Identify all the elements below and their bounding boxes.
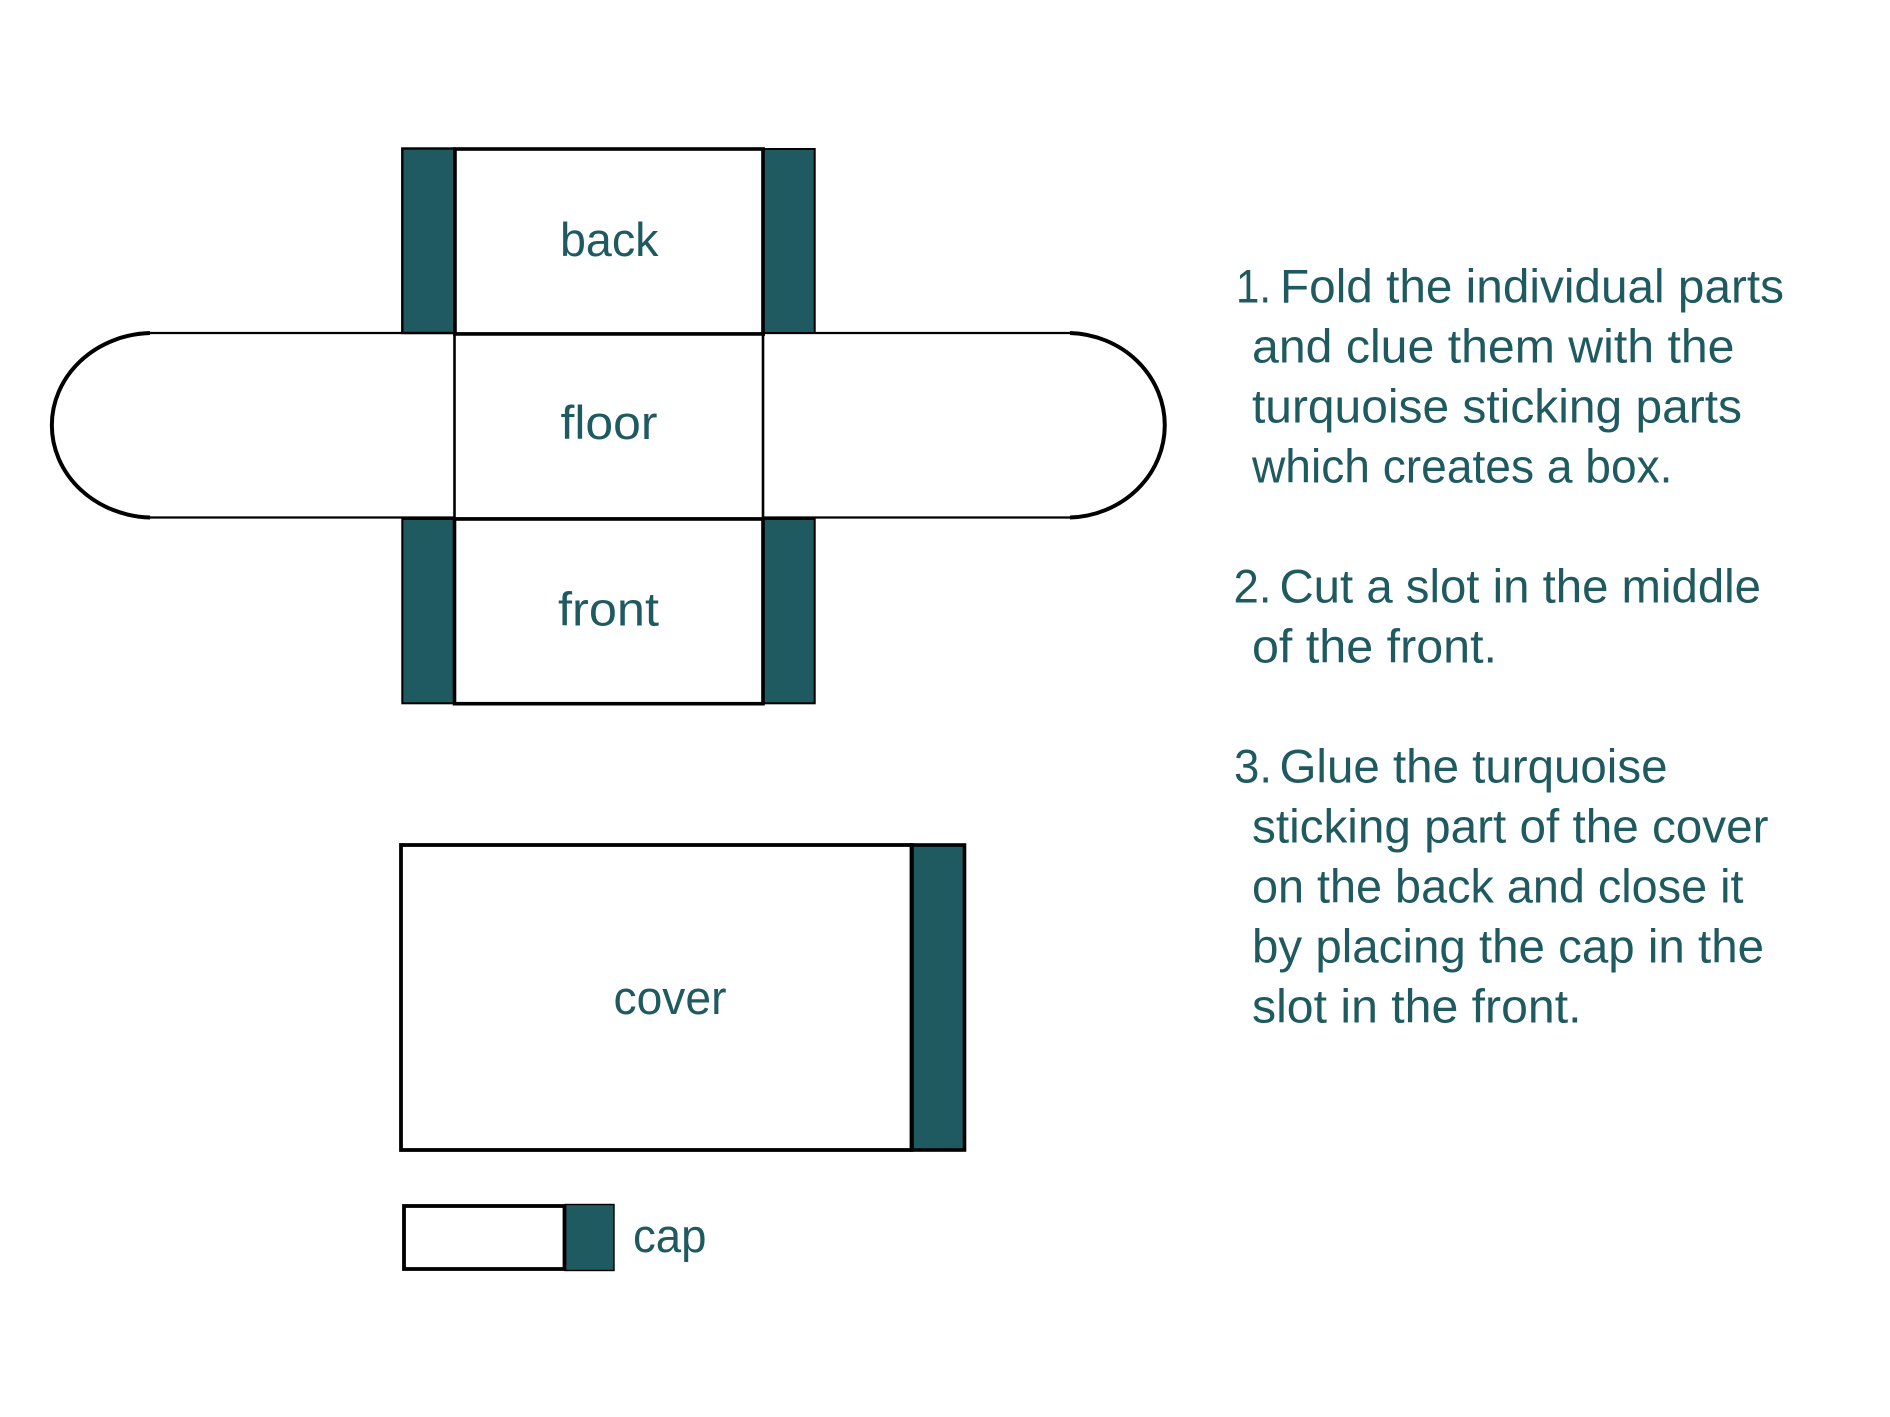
panel: back: back [560,213,659,266]
text block: step 2: Cut a slot in the middle [1280,559,1761,612]
panel: cap [404,1204,706,1270]
text block: step 2: of the front. [1252,619,1497,672]
sticking tab: front right [763,519,815,703]
cover sticking tab [912,845,964,1150]
text block: step 2 [1234,559,1761,672]
text block: step 1: and clue them with the [1252,319,1734,372]
text block: step 3 [1234,739,1768,1032]
text block: step 3: slot in the front. [1252,979,1582,1032]
text block: step 3: 3. [1234,739,1272,792]
cap label: cap [633,1209,706,1262]
text block: step 3: on the back and close it [1252,859,1744,912]
sticking tab: back left [402,148,454,333]
text block: step 1: 1. [1236,259,1271,312]
cover label: cover [614,971,726,1024]
text block: step 2: 2. [1234,559,1272,612]
panel: floor [453,334,765,519]
text block: step 3: sticking part of the cover [1252,799,1768,852]
text block: step 3: by placing the cap in the [1252,919,1764,972]
panel: cover [401,845,964,1150]
panel: front: front [558,582,659,636]
cover rectangle [401,845,912,1150]
left rounded side flap [52,333,454,518]
cap sticking tab [565,1204,614,1270]
text block: step 1: which creates a box. [1251,439,1672,492]
text block: step 1 [1236,259,1784,492]
panel: box net template [52,148,1165,704]
text block: step 1: Fold the individual parts [1280,259,1784,312]
text block: step 1: turquoise sticking parts [1252,379,1742,432]
panel: front [454,519,763,704]
text block: step 3: Glue the turquoise [1280,739,1668,792]
panel: floor: floor [560,396,658,449]
sticking tab: back right [763,149,815,333]
panel: back [455,149,763,334]
right rounded side flap [763,333,1165,518]
cap rectangle [404,1206,564,1269]
sticking tab: front left [402,519,454,703]
